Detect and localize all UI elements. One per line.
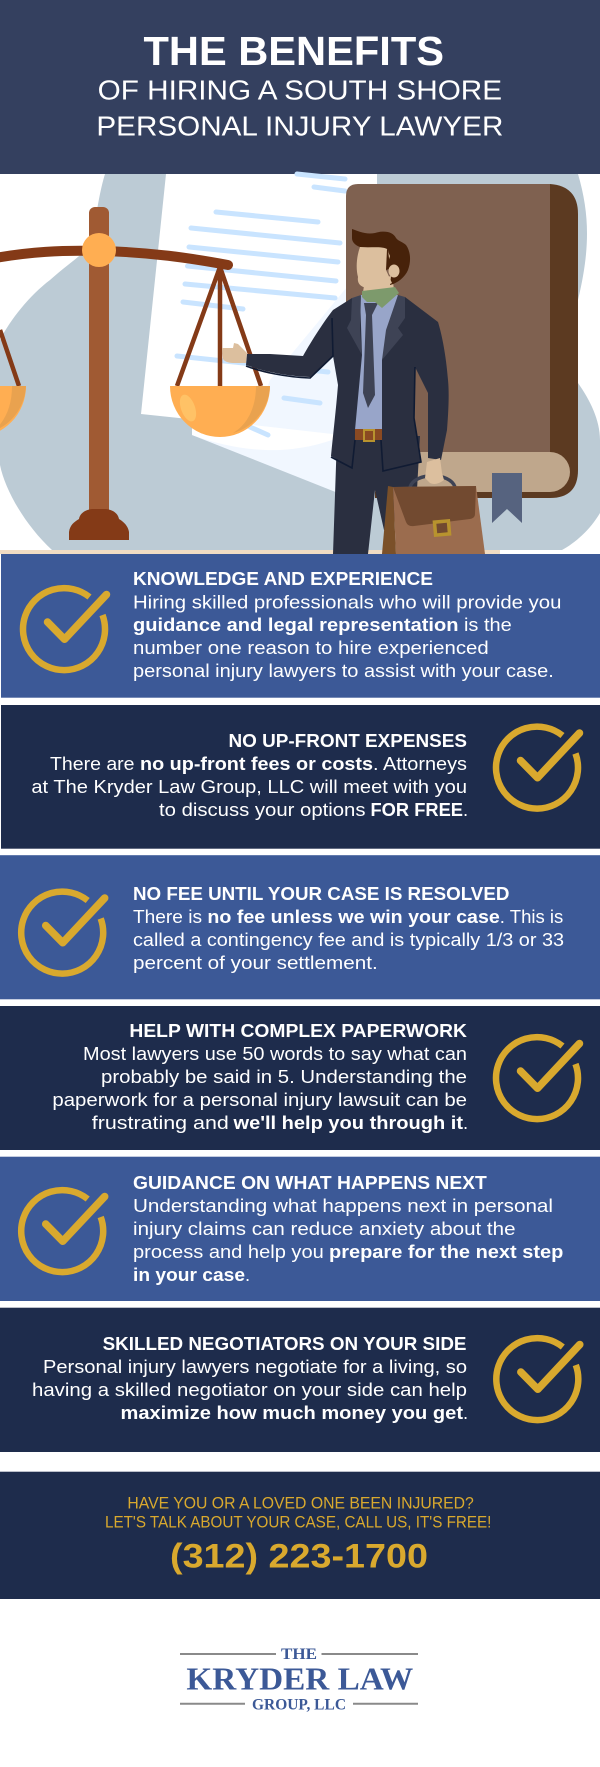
heading: KNOWLEDGE AND EXPERIENCE <box>133 568 433 589</box>
body text: paperwork for a personal injury lawsuit can be <box>52 1089 467 1110</box>
body text: personal injury lawyers to assist with your case. <box>133 660 554 681</box>
body text: There are <box>50 753 134 774</box>
cta line 2: LET'S TALK ABOUT YOUR CASE, CALL US, IT'S FREE! <box>105 1514 491 1532</box>
body text: guidance and legal representation <box>133 614 458 635</box>
body text: . Attorneys <box>373 753 467 774</box>
body text: . <box>463 799 468 820</box>
cta line 1: HAVE YOU OR A LOVED ONE BEEN INJURED? <box>127 1495 474 1513</box>
body text <box>32 1356 468 1423</box>
subtitle line 1: OF HIRING A SOUTH SHORE <box>98 74 502 105</box>
body text: percent of your settlement. <box>133 952 378 973</box>
check icon <box>496 1338 580 1420</box>
scales of justice <box>0 207 270 540</box>
body text: to discuss your options <box>159 799 366 820</box>
body text: Personal injury lawyers negotiate for a living, so <box>43 1356 467 1377</box>
body text: in your case <box>133 1264 245 1285</box>
body text: having a skilled negotiator on your side can help <box>32 1379 467 1400</box>
tie <box>363 303 378 408</box>
body text: There is <box>133 906 202 927</box>
document pages <box>141 174 377 493</box>
body text: . This is <box>500 906 563 927</box>
heading: HELP WITH COMPLEX PAPERWORK <box>129 1020 468 1041</box>
heading: NO FEE UNTIL YOUR CASE IS RESOLVED <box>133 883 509 904</box>
jacket <box>246 297 449 471</box>
bag handle <box>410 476 455 487</box>
logo: kryder law: KRYDER LAW <box>186 1660 413 1696</box>
body text: is the <box>464 614 512 635</box>
collar <box>362 287 399 308</box>
panel: knowledge and experience <box>1 554 600 698</box>
background blob <box>0 174 600 550</box>
panel: no up-front expenses <box>1 705 600 849</box>
hand <box>222 343 247 363</box>
body text: . <box>463 1112 468 1133</box>
phone number: (312) 223-1700 <box>170 1537 428 1575</box>
title: the benefits: THE BENEFITS <box>144 28 444 74</box>
body text <box>133 906 564 973</box>
body text: probably be said in 5. Understanding the <box>101 1066 467 1087</box>
heading: NO UP-FRONT EXPENSES <box>228 730 467 751</box>
hair <box>352 229 410 285</box>
body text <box>133 591 561 681</box>
panel: skilled negotiators on your side <box>0 1308 600 1452</box>
check icon <box>21 1190 105 1272</box>
trousers <box>333 436 420 554</box>
shirt <box>355 295 398 430</box>
lawyer figure <box>222 229 485 554</box>
lapels <box>347 295 405 360</box>
body text: FOR FREE <box>370 799 463 820</box>
subtitle line 2: PERSONAL INJURY LAWYER <box>96 110 503 141</box>
logo: the kryder law group <box>180 1646 418 1713</box>
body text: frustrating and <box>92 1112 229 1133</box>
neck <box>362 276 395 298</box>
body text: Understanding what happens next in personal <box>133 1195 553 1216</box>
check icon <box>496 727 580 809</box>
hand on bag <box>425 458 444 484</box>
body text: Most lawyers use 50 words to say what can <box>83 1043 467 1064</box>
body text: number one reason to hire experienced <box>133 637 489 658</box>
body text <box>52 1043 468 1133</box>
body text: no up-front fees or costs <box>140 753 373 774</box>
call to action panel <box>0 1472 600 1599</box>
body text: process and help you <box>133 1241 324 1262</box>
heading: SKILLED NEGOTIATORS ON YOUR SIDE <box>103 1333 466 1354</box>
body text: maximize how much money you get <box>120 1402 463 1423</box>
body text: . <box>463 1402 468 1423</box>
logo: group llc: GROUP, LLC <box>252 1696 346 1713</box>
peach floor stripe <box>0 550 500 554</box>
panel: guidance on what happens next <box>0 1157 600 1301</box>
body text: no fee unless we win your case <box>207 906 500 927</box>
body text: called a contingency fee and is typically 1/3 or 33 <box>133 929 564 950</box>
belt <box>355 429 382 440</box>
check icon <box>23 588 107 670</box>
body text: at The Kryder Law Group, LLC will meet with you <box>31 776 467 797</box>
face <box>357 247 392 288</box>
illustration: lawyer with scales and law book <box>0 174 600 554</box>
body text: Hiring skilled professionals who will provide you <box>133 591 561 612</box>
body text <box>133 1195 563 1285</box>
heading: GUIDANCE ON WHAT HAPPENS NEXT <box>133 1172 488 1193</box>
body text: injury claims can reduce anxiety about the <box>133 1218 516 1239</box>
body text: we'll help you through it <box>232 1112 463 1133</box>
logo: the: THE <box>281 1646 317 1663</box>
briefcase <box>382 486 485 554</box>
law book <box>346 184 578 523</box>
bookmark ribbon <box>492 473 522 523</box>
body text: . <box>245 1264 250 1285</box>
check icon <box>21 892 105 974</box>
panel: no fee until your case is resolved <box>0 855 600 999</box>
body text: prepare for the next step <box>329 1241 563 1262</box>
check icon <box>496 1037 580 1119</box>
panel: help with complex paperwork <box>0 1006 600 1150</box>
body text <box>31 753 468 820</box>
header: title block <box>0 0 600 174</box>
